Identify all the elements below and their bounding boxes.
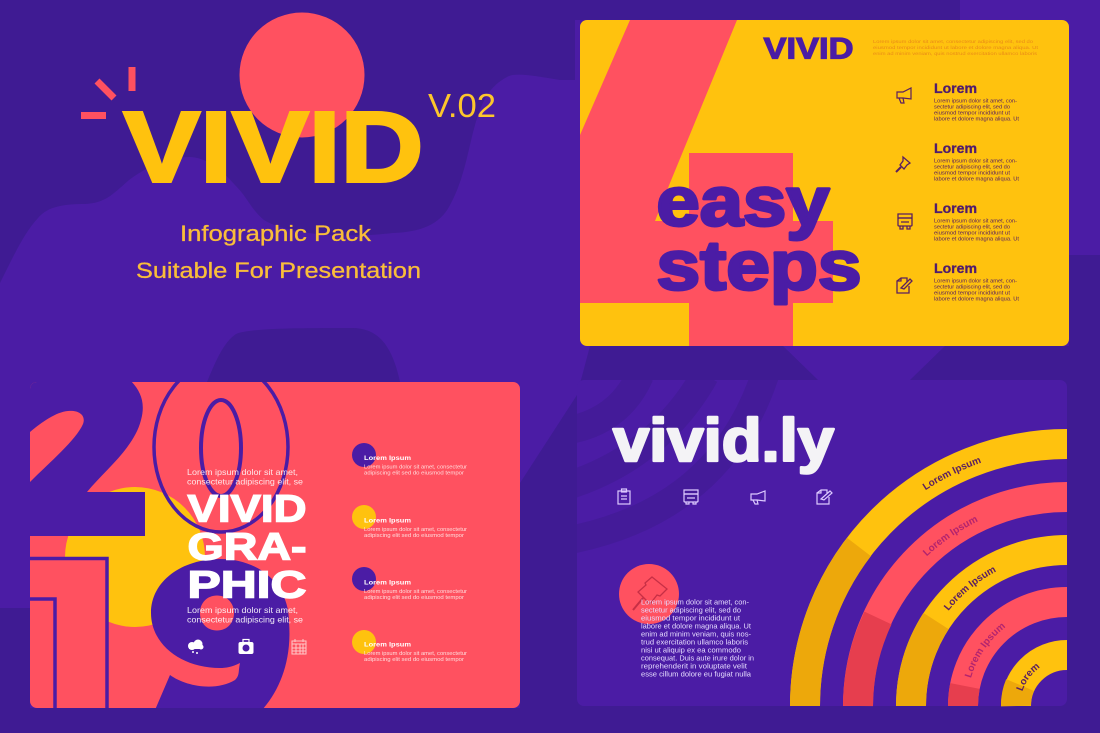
list item 3 xyxy=(352,567,467,601)
list item 1: adipiscing elit sed do eiusmod tempor xyxy=(364,470,464,476)
number 9 xyxy=(151,559,289,710)
heading: VIVID GRA-PHIC xyxy=(188,488,306,606)
body text: trud exercitation ullamco laboris xyxy=(641,638,748,646)
step 2: Lorem ipsum dolor sit amet, con- xyxy=(934,158,1017,164)
panel: 4 easy steps xyxy=(580,20,1069,346)
step 4: Lorem ipsum dolor sit amet, con- xyxy=(934,278,1017,284)
arc labels: Lorem Ipsum xyxy=(944,568,996,610)
body text: eiusmod tempor incididunt ut xyxy=(641,614,740,622)
header paragraph: Lorem ipsum dolor sit amet, consectetur adipiscing elit, sed do xyxy=(873,39,1033,45)
icon: megaphone xyxy=(897,88,911,103)
list item 4: Lorem Ipsum xyxy=(364,642,411,648)
icon: car front xyxy=(684,490,698,504)
lower text: Lorem ipsum dolor sit amet, xyxy=(187,605,298,615)
heading: VIVID GRA-PHIC: VIVID xyxy=(188,488,306,530)
body text: labore et dolore magna aliqua. Ut xyxy=(641,622,751,630)
icon: cloud xyxy=(188,640,204,654)
heading: VIVID GRA-PHIC: PHIC xyxy=(188,564,306,606)
step 2: sectetur adipiscing elit, sed do xyxy=(934,164,1010,170)
panel: 2019 vivid graphic xyxy=(20,362,520,710)
step 2: labore et dolore magna aliqua. Ut xyxy=(934,176,1019,182)
arc labels: Lorem Ipsum xyxy=(922,517,978,556)
lower text xyxy=(187,605,303,624)
icon: car front xyxy=(898,214,912,229)
list item 3: adipiscing elit sed do eiusmod tempor xyxy=(364,595,464,601)
easy steps heading: easy xyxy=(656,162,830,240)
intro text: consectetur adipiscing elit, se xyxy=(187,476,303,486)
list item 4: adipiscing elit sed do eiusmod tempor xyxy=(364,657,464,663)
list item 3: Lorem ipsum dolor sit amet, consectetur xyxy=(364,589,467,595)
icon: megaphone xyxy=(751,491,765,504)
body text: esse cillum dolore eu fugiat nulla xyxy=(641,670,752,678)
body text: consequat. Duis aute irure dolor in xyxy=(641,654,754,662)
icon: clipboard xyxy=(618,489,630,504)
number 1 outline xyxy=(20,558,107,710)
spark rays xyxy=(81,67,132,116)
easy steps heading: steps xyxy=(656,226,862,304)
arc band 4 xyxy=(963,602,1067,706)
arc band 1 xyxy=(805,444,1067,706)
lower text: consectetur adipiscing elit, se xyxy=(187,614,303,624)
icon: note and pencil xyxy=(897,278,912,293)
body text xyxy=(641,598,754,678)
step 1: labore et dolore magna aliqua. Ut xyxy=(934,116,1019,122)
list item 2: Lorem ipsum dolor sit amet, consectetur xyxy=(364,527,467,533)
panel: vivid.ly xyxy=(577,380,1067,706)
step 3: eiusmod tempor incididunt ut xyxy=(934,230,1010,236)
red sun circle xyxy=(240,12,364,138)
list item 4: Lorem ipsum dolor sit amet, consectetur xyxy=(364,651,467,657)
list item 1: Lorem Ipsum xyxy=(364,455,411,462)
step 3: Lorem ipsum dolor sit amet, con- xyxy=(934,218,1017,224)
step 1: eiusmod tempor incididunt ut xyxy=(934,110,1010,116)
step 1: sectetur adipiscing elit, sed do xyxy=(934,104,1010,110)
intro text xyxy=(187,467,303,486)
list item 2: Lorem Ipsum xyxy=(364,518,411,524)
list item 1: Lorem ipsum dolor sit amet, consectetur xyxy=(364,464,467,470)
arc band 2 xyxy=(858,497,1067,706)
arc labels: Lorem Ipsum xyxy=(922,458,981,490)
step 1 xyxy=(897,81,1019,122)
list item 2: adipiscing elit sed do eiusmod tempor xyxy=(364,533,464,539)
arc chart xyxy=(805,444,1067,706)
body text: Lorem ipsum dolor sit amet, con- xyxy=(641,598,750,606)
intro text: Lorem ipsum dolor sit amet, xyxy=(187,467,298,477)
easy steps heading xyxy=(656,162,862,304)
icon: note and pencil xyxy=(817,490,832,504)
list item 1 xyxy=(352,443,467,476)
step 4: eiusmod tempor incididunt ut xyxy=(934,290,1010,296)
step 4: labore et dolore magna aliqua. Ut xyxy=(934,296,1019,302)
heading: VIVID GRA-PHIC: GRA- xyxy=(188,526,306,568)
list item 3: Lorem Ipsum xyxy=(364,580,411,586)
body text: reprehenderit in voluptate velit xyxy=(641,662,747,670)
step 2: Lorem xyxy=(934,141,977,156)
arc labels xyxy=(922,458,1040,691)
icon: push pin xyxy=(896,157,910,172)
subtitle line 2: Suitable For Presentation xyxy=(136,258,421,283)
list item 2 xyxy=(352,505,467,539)
icon: camera xyxy=(238,640,254,654)
step 3: labore et dolore magna aliqua. Ut xyxy=(934,236,1019,242)
icon: red circle with pin xyxy=(619,564,679,624)
version label: V.02 xyxy=(428,87,496,124)
arc labels: Lorem xyxy=(1016,664,1040,691)
big number 4 xyxy=(580,20,833,346)
arc band 3 xyxy=(911,550,1067,706)
header paragraph: enim ad minim veniam, quis nostrud exercitation ullamco laboris xyxy=(873,51,1038,57)
arc band 5 xyxy=(1016,655,1067,706)
header paragraph xyxy=(873,39,1039,57)
step 3: Lorem xyxy=(934,201,977,216)
number 0 outline xyxy=(154,362,288,532)
heading: vivid.ly xyxy=(613,407,835,474)
subtitle line 1: Infographic Pack xyxy=(180,221,372,246)
step 4: sectetur adipiscing elit, sed do xyxy=(934,284,1010,290)
title block xyxy=(81,12,496,283)
step 2: eiusmod tempor incididunt ut xyxy=(934,170,1010,176)
coral band above number 1 xyxy=(30,536,65,560)
step 4 xyxy=(897,261,1019,302)
list item 4 xyxy=(352,630,467,663)
body text: sectetur adipiscing elit, sed do xyxy=(641,606,741,614)
header paragraph: eiusmod tempor incididunt ut labore et dolore magna aliqua. Ut xyxy=(873,45,1039,51)
step 4: Lorem xyxy=(934,261,977,276)
VIVID heading: VIVID xyxy=(124,92,424,204)
icon: calendar xyxy=(292,639,306,654)
step 3: sectetur adipiscing elit, sed do xyxy=(934,224,1010,230)
VIVID logo: VIVID xyxy=(764,32,854,66)
step 1: Lorem xyxy=(934,81,977,96)
step 2 xyxy=(896,141,1019,182)
body text: nisi ut aliquip ex ea commodo xyxy=(641,646,741,654)
number 2 xyxy=(20,380,145,536)
step 1: Lorem ipsum dolor sit amet, con- xyxy=(934,98,1017,104)
yellow circle xyxy=(65,487,205,627)
body text: enim ad minim veniam, quis nos- xyxy=(641,630,752,638)
arc labels: Lorem Ipsum xyxy=(964,624,1006,678)
step 3 xyxy=(898,201,1019,242)
